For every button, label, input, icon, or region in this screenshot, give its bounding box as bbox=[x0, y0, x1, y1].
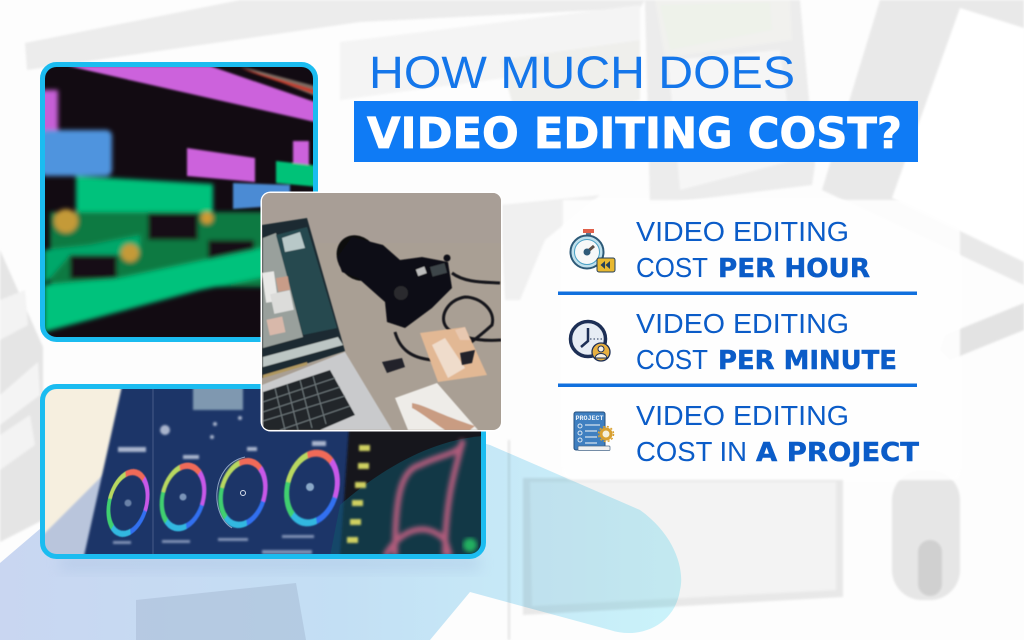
text: cost per hour: PER HOUR bbox=[718, 254, 870, 284]
laptop keyboard bbox=[262, 352, 392, 430]
laptop screen bbox=[262, 218, 345, 378]
faded tablet bbox=[136, 583, 306, 640]
text: cost in a project bbox=[636, 400, 919, 468]
text: cost per minute: COST bbox=[636, 344, 708, 375]
print with hand bbox=[395, 383, 478, 430]
icon: stopwatch with rewind bbox=[570, 229, 615, 272]
icon: project document with gear bbox=[574, 412, 614, 450]
title: how much does: HOW MUCH DOES bbox=[369, 47, 795, 98]
memory cards bbox=[382, 350, 475, 373]
panel: cost list card bbox=[558, 200, 960, 480]
text: cost per minute bbox=[636, 308, 897, 376]
icon: clock with person bbox=[570, 322, 610, 361]
camera bbox=[336, 234, 453, 328]
text: cost per hour bbox=[636, 216, 870, 284]
text: cost per hour: COST bbox=[636, 252, 708, 283]
color wheels bbox=[102, 448, 344, 538]
text: cost in a project: VIDEO EDITING bbox=[636, 400, 849, 431]
panel: color grading photo bbox=[42, 386, 484, 556]
text: cost per hour: VIDEO EDITING bbox=[636, 216, 849, 247]
decorative blob bbox=[0, 426, 681, 640]
print on table bbox=[420, 327, 487, 382]
frame shadow bbox=[60, 556, 480, 570]
wheel details bbox=[113, 386, 370, 556]
text: cost per minute: VIDEO EDITING bbox=[636, 308, 849, 339]
panel: laptop and camera photo bbox=[260, 192, 502, 432]
text: cost per minute: PER MINUTE bbox=[718, 346, 897, 376]
heading banner: VIDEO EDITING COST? bbox=[367, 110, 902, 159]
panel: blurred timeline photo bbox=[38, 64, 320, 340]
text: cost in a project: A PROJECT bbox=[756, 438, 919, 468]
icon: project document with gear: PROJECT bbox=[576, 415, 604, 422]
camera strap bbox=[395, 273, 501, 360]
text: cost in a project: COST IN bbox=[636, 436, 747, 467]
